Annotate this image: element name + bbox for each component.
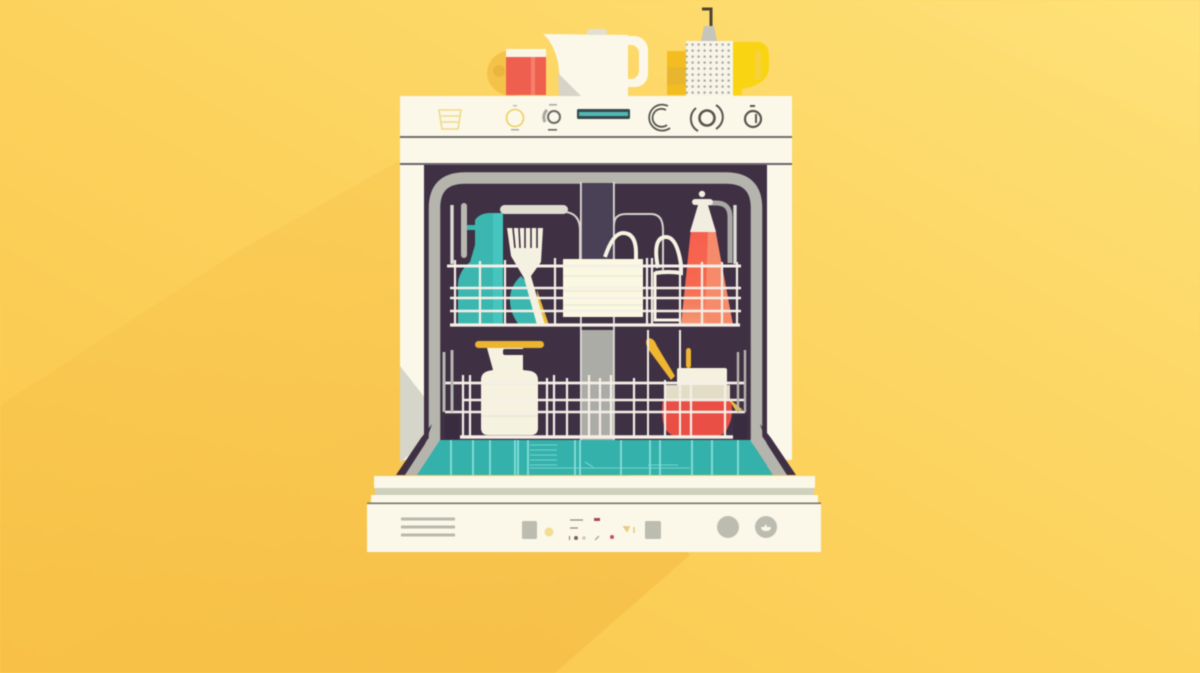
upper rack items xyxy=(458,191,733,325)
yellow mug behind grater xyxy=(667,42,769,95)
upper wire rack xyxy=(447,205,741,325)
open door front xyxy=(367,476,821,552)
round buttons xyxy=(717,516,739,538)
square buttons xyxy=(522,521,537,539)
lower wire rack xyxy=(444,330,747,439)
stack of plates xyxy=(563,259,643,317)
red jar xyxy=(506,49,546,95)
grey door seal xyxy=(434,178,756,445)
teal jug xyxy=(458,203,503,325)
dishwasher body xyxy=(400,165,792,475)
icon: large knob C xyxy=(649,105,670,131)
icon: large knob O xyxy=(691,105,723,131)
soap dispenser with grated body xyxy=(686,9,733,96)
red carafe xyxy=(681,191,733,325)
vent lines xyxy=(401,519,455,535)
icon: timer knob xyxy=(745,105,761,127)
dishwasher top control panel xyxy=(400,96,792,166)
icon: cup xyxy=(439,110,461,129)
white bottle with yellow lid xyxy=(475,341,544,435)
display xyxy=(577,109,630,119)
small indicator icons xyxy=(544,518,634,540)
red pot xyxy=(662,368,743,436)
spray arm tube xyxy=(500,205,663,270)
white pitcher xyxy=(543,29,648,96)
white cup loops xyxy=(605,233,681,320)
teal floor of door interior xyxy=(396,424,796,475)
central spray column xyxy=(580,182,615,442)
icon: yellow dial xyxy=(506,105,524,130)
yellow mug behind red jar xyxy=(487,50,537,96)
items on top of dishwasher xyxy=(487,9,769,96)
lower rack items xyxy=(475,338,743,436)
icon: grey dial xyxy=(544,104,560,131)
forks with yellow handle xyxy=(507,228,549,325)
teal vase xyxy=(510,276,537,325)
yellow spoon xyxy=(646,338,675,380)
